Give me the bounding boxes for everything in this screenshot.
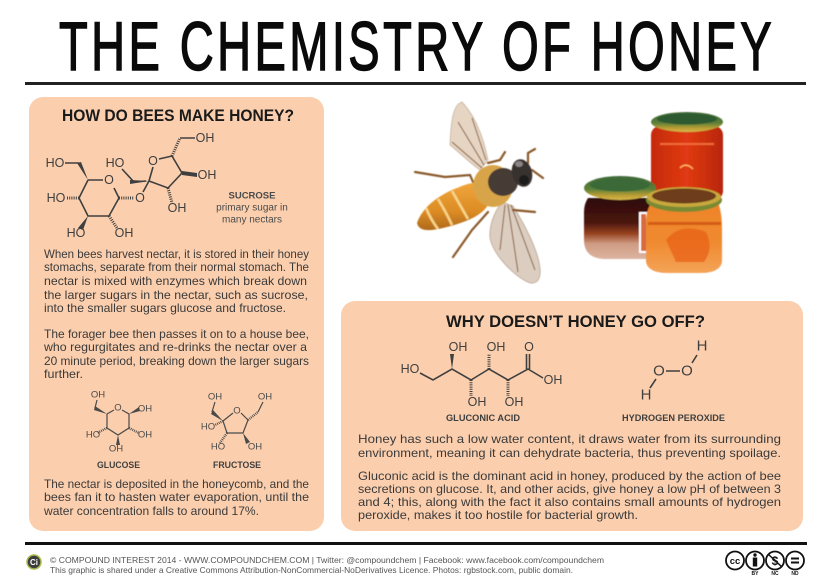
chemical structure: glucose: GLUCOSE — [97, 460, 141, 471]
footer logo: Ci — [30, 558, 38, 567]
chemical structure: hydrogen peroxide: HYDROGEN PEROXIDE — [622, 413, 726, 424]
chemical structure: gluconic acid: OH — [449, 340, 467, 354]
chemical structure: fructose — [201, 392, 272, 471]
chemical structure: hydrogen peroxide: H — [641, 386, 651, 404]
illustration: bee — [415, 102, 543, 283]
footer credits: This graphic is shared under a Creative Commons Attribution-NonCommercial-NoDerivatives Licence. Photos: rgbstock.com, public domain. — [50, 565, 573, 575]
chemical structure: glucose: OH — [91, 390, 105, 400]
text block: gluconic acid: peroxide, makes it too hostile for bacterial growth. — [358, 508, 638, 522]
text block: harvesting: stomachs, separate from their normal stomach. The — [44, 260, 309, 274]
chemical structure: gluconic acid: OH — [468, 395, 486, 409]
chemical structure: glucose: HO — [86, 430, 100, 440]
text block: gluconic acid — [358, 469, 781, 522]
text block: gluconic acid: secretions on glucose. It, and other acids, give honey a low pH of between 3 — [358, 482, 781, 496]
chemical structure: gluconic acid: HO — [401, 362, 420, 376]
text block: honeycomb: bees fan it to hasten water evaporation, until the — [44, 490, 309, 504]
chemical structure: gluconic acid: O — [524, 340, 534, 354]
chemical structure: fructose: FRUCTOSE — [213, 460, 262, 471]
text block: water content: environment, meaning it can dehydrate bacteria, thus preventing spoilage. — [358, 446, 781, 460]
text block: house bee: 20 minute period, breaking down the larger sugars — [44, 354, 309, 368]
text block: house bee: who regurgitates and re-drinks the nectar over a — [43, 340, 307, 354]
text block: house bee — [43, 327, 309, 381]
text block: harvesting: When bees harvest nectar, it is stored in their honey — [44, 247, 309, 261]
text block: harvesting: nectar is mixed with enzymes which break down — [44, 274, 307, 288]
licence icons: NC — [771, 571, 779, 577]
text block: house bee: further. — [44, 367, 83, 381]
panel: why doesn't honey go off — [341, 301, 803, 531]
jar: dark — [584, 176, 656, 259]
text block: harvesting: the larger sugars in the nectar, such as sucrose, — [44, 288, 308, 302]
licence icons: cc — [730, 556, 740, 567]
chemical structure: fructose: O — [233, 406, 241, 416]
chemical structure: glucose: O — [114, 402, 122, 414]
chemical structure: sucrose: OH — [198, 168, 216, 182]
chemical structure: gluconic acid: OH — [487, 340, 505, 354]
chemical structure: gluconic acid: OH — [544, 373, 562, 387]
footer logo — [27, 555, 41, 569]
text block: house bee: The forager bee then passes it on to a house bee, — [44, 327, 309, 341]
chemical structure: glucose: OH — [138, 430, 152, 440]
text block: water content: Honey has such a low water content, it draws water from its surrounding — [358, 432, 781, 446]
chemical structure: hydrogen peroxide: H — [697, 338, 707, 354]
jar: red — [651, 112, 723, 200]
text block: honeycomb — [43, 477, 309, 518]
chemical structure: fructose: OH — [208, 392, 222, 402]
chemical structure: hydrogen peroxide: O — [681, 362, 693, 380]
text block: honeycomb: water concentration falls to around 17%. — [43, 504, 259, 518]
chemical structure: sucrose — [46, 131, 216, 240]
licence icons: $ — [772, 554, 779, 568]
chemical structure: sucrose: HO — [46, 156, 65, 170]
heading: how do bees make honey: HOW DO BEES MAKE HONEY? — [62, 107, 294, 125]
chemical structure: fructose: HO — [201, 422, 215, 432]
panel: how do bees make honey — [29, 97, 324, 531]
chemical structure: sucrose: HO — [67, 226, 86, 240]
licence icons — [726, 552, 804, 577]
licence icons: BY — [752, 571, 759, 577]
jar: orange — [646, 187, 722, 273]
text block: gluconic acid: Gluconic acid is the dominant acid in honey, produced by the action of bee — [358, 469, 781, 483]
label: sucrose: many nectars — [222, 214, 282, 226]
chemical structure: sucrose: OH — [196, 131, 214, 145]
label: sucrose: SUCROSE — [229, 190, 275, 202]
chemical structure: fructose: OH — [258, 392, 272, 402]
licence icons: ND — [791, 571, 799, 577]
chemical structure: gluconic acid: OH — [505, 395, 523, 409]
chemical structure: glucose: OH — [138, 404, 152, 414]
chemical structure: sucrose: O — [135, 191, 145, 205]
chemical structure: fructose: HO — [211, 442, 225, 452]
chemical structure: sucrose: OH — [168, 201, 186, 215]
footer credits — [50, 555, 604, 575]
chemical structure: gluconic acid: GLUCONIC ACID — [446, 413, 520, 424]
chemical structure: gluconic acid — [401, 340, 562, 424]
text block: honeycomb: The nectar is deposited in the honeycomb, and the — [44, 477, 309, 491]
chemical structure: glucose — [86, 390, 152, 471]
chemical structure: sucrose: HO — [47, 191, 66, 205]
text block: harvesting — [44, 247, 309, 315]
chemical structure: sucrose: O — [148, 154, 158, 168]
illustration: honey jars — [584, 112, 723, 273]
text block: water content — [358, 432, 781, 460]
chemical structure: sucrose: O — [104, 173, 114, 187]
chemical structure: sucrose: HO — [106, 156, 125, 170]
text block: harvesting: into the smaller sugars glucose and fructose. — [44, 301, 286, 315]
label: sucrose: primary sugar in — [216, 202, 288, 214]
label: sucrose — [216, 190, 288, 226]
chemical structure: hydrogen peroxide: O — [653, 362, 665, 380]
heading: why doesn't honey go off: WHY DOESN’T HONEY GO OFF? — [446, 313, 705, 331]
chemical structure: sucrose: OH — [115, 226, 133, 240]
text block: gluconic acid: and 4; this, along with the fact it also contains small amounts of hydrogen — [358, 495, 781, 509]
chemical structure: hydrogen peroxide — [622, 338, 726, 424]
chemical structure: fructose: OH — [248, 442, 262, 452]
chemical structure: glucose: OH — [109, 444, 123, 454]
footer credits: © COMPOUND INTEREST 2014 - WWW.COMPOUNDCHEM.COM | Twitter: @compoundchem | Facebook: www.facebook.com/compoundchem — [50, 555, 604, 565]
